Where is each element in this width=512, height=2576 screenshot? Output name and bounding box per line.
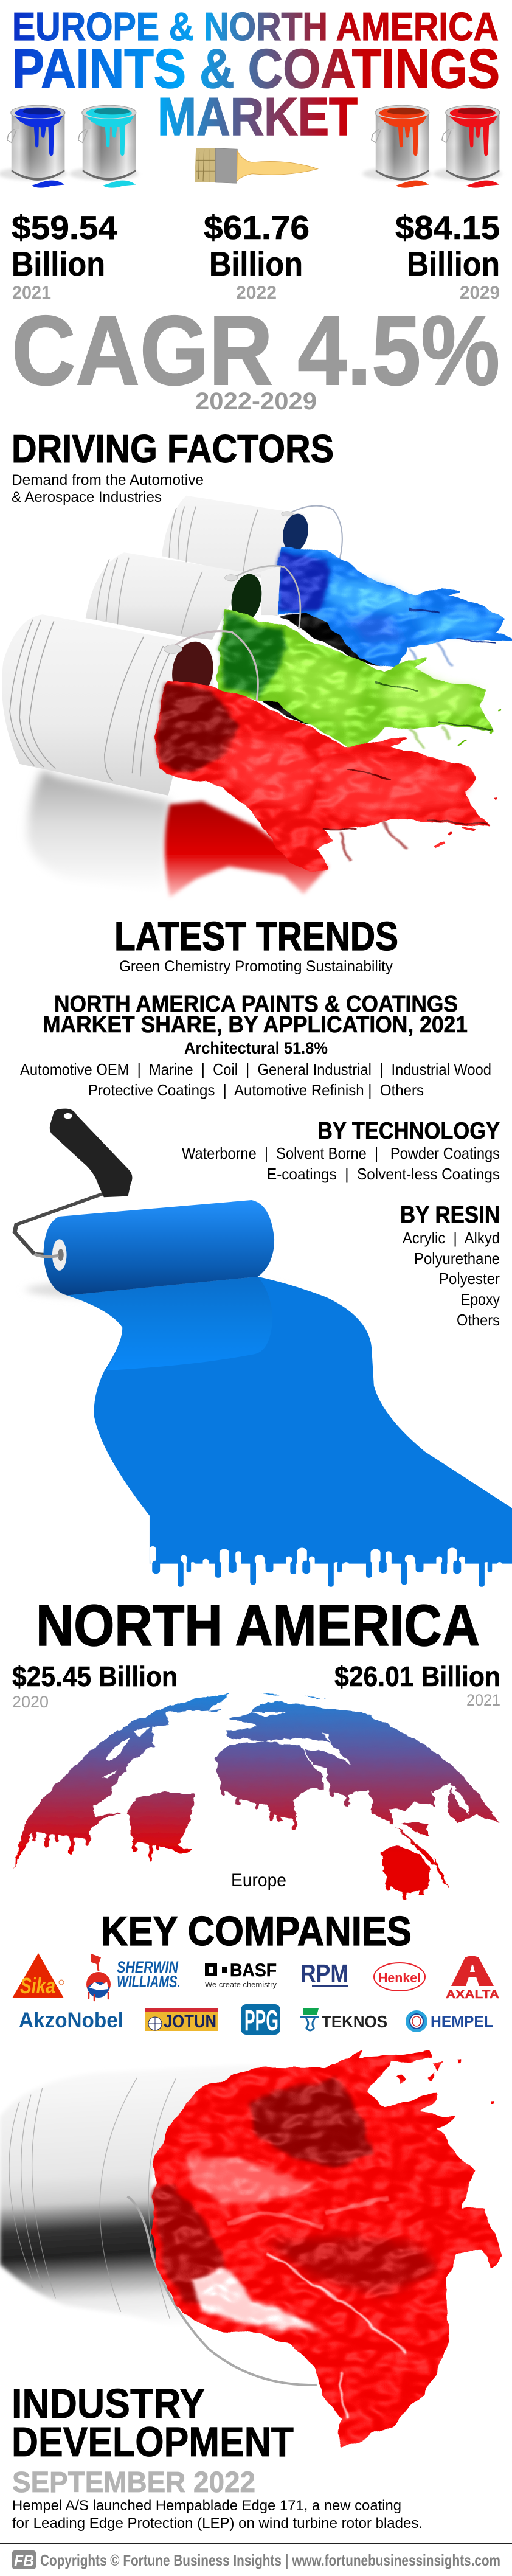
stat: 2021 market size: $59.54	[12, 209, 117, 246]
heading: key companies: KEY COMPANIES	[101, 1908, 412, 1954]
text: leading application share: Architectural 51.8%	[184, 1039, 328, 1057]
stat: 2029 market size	[395, 209, 500, 303]
stat: 2020 north america: 2020	[12, 1693, 49, 1711]
title line: Market: MARKET	[157, 86, 358, 147]
stat: 2021 north america: $26.01 Billion	[334, 1661, 500, 1692]
red bucket	[2, 614, 258, 796]
stat: 2021 north america: 2021	[466, 1691, 500, 1709]
footer rule	[0, 2543, 512, 2544]
text: resin segments: Polyester	[439, 1269, 500, 1288]
map: white lakes and seas	[101, 1712, 470, 1814]
stat: 2022 market size: Billion	[209, 245, 303, 283]
heading: market share by application: MARKET SHARE, BY APPLICATION, 2021	[43, 1012, 468, 1038]
paint strip with drips	[26, 1277, 512, 1585]
icon: orange paint can	[362, 105, 431, 188]
map: north america land	[13, 1694, 230, 1869]
stat: 2029 market size: 2029	[460, 283, 500, 303]
stat: 2020 north america	[12, 1661, 178, 1711]
logo: PPG	[241, 2004, 280, 2037]
logo: Hempel: HEMPEL	[431, 2012, 493, 2030]
text: driving factors description	[12, 472, 204, 505]
logo: Sherwin-Williams: WILLIAMS.	[117, 1973, 181, 1991]
heading: latest trends: LATEST TRENDS	[114, 914, 398, 959]
logo: Sika: Sika	[20, 1973, 55, 1998]
stat: 2029 market size: $84.15	[395, 209, 500, 246]
illustration: paint roller and blue strip	[15, 1109, 512, 1585]
text: development date: SEPTEMBER 2022	[12, 2467, 255, 2499]
text: latest trends description: Green Chemistry Promoting Sustainability	[119, 958, 393, 975]
logo: PPG: PPG	[244, 2005, 278, 2037]
stat: 2021 market size	[12, 209, 117, 303]
logo: Sika	[12, 1953, 64, 1998]
text: resin segments	[403, 1229, 500, 1329]
map: eurasia land	[227, 1701, 500, 1823]
heading: market share by application	[43, 991, 468, 1038]
chart: dripping world map	[13, 1694, 500, 1898]
icon: blue paint can	[0, 105, 67, 188]
logo: Henkel	[374, 1963, 425, 1991]
logo: Henkel: Henkel	[378, 1970, 421, 1985]
text: resin segments: Polyurethane	[414, 1249, 500, 1268]
stat: 2022 market size: 2022	[236, 283, 277, 303]
red paint mass	[153, 2051, 500, 2448]
heading: market share by application: NORTH AMERICA PAINTS & COATINGS	[54, 991, 458, 1017]
logo: Axalta: AXALTA	[446, 1988, 499, 2001]
stat: 2020 north america: $25.45 Billion	[12, 1661, 178, 1692]
heading: industry development: DEVELOPMENT	[12, 2418, 294, 2465]
logo: BASF: We create chemistry	[205, 1981, 277, 1989]
text: technology segments: E-coatings | Solvent-less Coatings	[267, 1165, 500, 1183]
title	[12, 4, 500, 147]
logo: Jotun: JOTUN	[164, 2012, 216, 2032]
text: map label europe: Europe	[231, 1870, 286, 1890]
roller cylinder and frame	[15, 1188, 274, 1295]
green bucket	[86, 552, 300, 640]
icon: publisher logo: FB	[14, 2552, 34, 2570]
icon: cyan paint can	[69, 105, 138, 188]
stat: 2022 market size: $61.76	[204, 209, 310, 246]
text: other applications: Protective Coatings | Automotive Refinish | Others	[88, 1081, 424, 1099]
green paint splash	[219, 610, 500, 748]
red paint splash	[155, 679, 500, 872]
heading: industry development: INDUSTRY	[12, 2380, 205, 2427]
map: africa land	[215, 1741, 323, 1820]
logo: Sherwin-Williams: SHERWIN	[117, 1958, 178, 1976]
logo: Teknos: TEKNOS	[322, 2012, 387, 2031]
stat: 2029 market size: Billion	[407, 245, 500, 283]
text: driving factors description: & Aerospace Industries	[12, 489, 162, 505]
map: south america land	[129, 1793, 195, 1853]
reflection of red bucket	[27, 770, 328, 897]
stat: 2021 market size: Billion	[12, 245, 105, 283]
text: resin segments: Acrylic | Alkyd	[403, 1229, 500, 1247]
logo: RPM: RPM	[300, 1959, 348, 1987]
text: technology segments	[182, 1144, 500, 1183]
illustration: three tipped paint buckets	[2, 496, 511, 897]
illustration: bucket pouring red paint	[0, 2051, 500, 2448]
logo: Axalta	[446, 1956, 499, 2001]
logo: Teknos	[300, 2008, 387, 2031]
text: development description	[12, 2498, 423, 2532]
large silver bucket	[0, 2065, 317, 2385]
text: development description: for Leading Edge Protection (LEP) on wind turbine rotor blades.	[12, 2515, 423, 2532]
heading: by resin: BY RESIN	[400, 1202, 500, 1228]
icon: paint brush	[195, 148, 318, 183]
text: other applications	[20, 1060, 491, 1099]
heading: industry development	[12, 2380, 294, 2465]
blue paint splash	[277, 547, 511, 666]
logo: BASF	[205, 1960, 277, 1989]
heading: driving factors: DRIVING FACTORS	[12, 426, 334, 471]
text: development description: Hempel A/S launched Hempablade Edge 171, a new coating	[12, 2498, 401, 2514]
icon: red paint can	[433, 105, 502, 188]
logo: Jotun	[145, 2008, 218, 2032]
stat: 2021 north america	[334, 1661, 500, 1709]
logo: Sherwin-Williams	[86, 1954, 181, 2001]
text: driving factors description: Demand from the Automotive	[12, 472, 204, 488]
stat: 2021 market size: 2021	[12, 283, 51, 303]
footer: publisher logo and credit	[12, 2550, 500, 2570]
CAGR period: 2022-2029	[195, 388, 317, 415]
blue bucket	[162, 496, 342, 616]
text: resin segments: Others	[457, 1311, 500, 1329]
map: australia and south-east asia	[209, 1694, 449, 1894]
logo: AkzoNobel: AkzoNobel	[19, 2008, 123, 2032]
logo: Hempel	[406, 2010, 493, 2032]
stat: 2022 market size	[204, 209, 310, 303]
map: paint drips	[34, 1787, 422, 1898]
roller handle	[50, 1109, 132, 1197]
logo: BASF: BASF	[230, 1960, 277, 1981]
text: resin segments: Epoxy	[461, 1290, 500, 1308]
